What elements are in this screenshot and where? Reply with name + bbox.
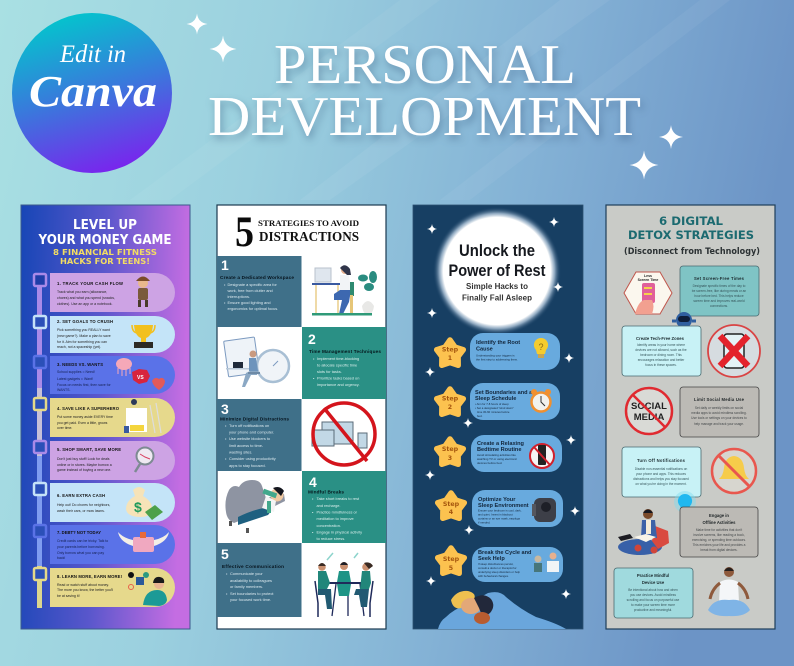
card 5: shop smart: Don't just buy stuff! Look for deals: [57, 457, 110, 461]
strategy 3: Minimize Digital Distractions: [220, 416, 289, 422]
heading: 5 strategies: [235, 209, 359, 256]
strategy 3: [217, 399, 302, 471]
card 5: shop smart: [50, 441, 175, 480]
heading: level up: YOUR MONEY GAME: [38, 233, 171, 248]
heading: 5 strategies: STRATEGIES TO AVOID: [258, 219, 359, 228]
icon: no social media: SOCIAL: [631, 401, 667, 412]
card: practice mindful device use: Practice Mindful: [637, 573, 669, 578]
card: turn off notifications: Disable non-essential notifications on: [635, 467, 688, 471]
card: set screen free times: screen time and improves real-world: [693, 299, 745, 303]
card 8: learn more: Read or watch stuff about money.: [57, 583, 109, 587]
strategy 2: [302, 327, 386, 399]
icon: detective: [136, 276, 150, 307]
icon: magnifier: [135, 448, 154, 472]
card 8: learn more: The more you know, the better you'll: [57, 588, 113, 592]
strategy 3: Consider using productivity: [229, 456, 276, 461]
card: engage in offline activities: break from digital devices.: [700, 548, 738, 552]
icon: bell crossed out: [712, 449, 756, 493]
card 6: earn extra cash: 6. EARN EXTRA CASH: [57, 493, 105, 498]
card 7: debt: Credit cards can be tricky. Talk to: [57, 539, 108, 543]
card: practice mindful device use: [614, 568, 693, 618]
badge: Edit in Canva: [12, 13, 172, 173]
card: turn off notifications: [622, 447, 701, 497]
card: turn off notifications: distractions and helps you stay focused: [633, 477, 689, 481]
card: practice mindful device use: you use devices. Avoid mindless: [630, 593, 676, 597]
card 8: learn more: [50, 568, 175, 607]
heading: 6 digital detox: [624, 214, 760, 257]
step 4: 4: [449, 509, 454, 516]
card: turn off notifications: Turn Off Notifications: [637, 458, 686, 463]
card: create tech free zones: focus in these spaces.: [645, 363, 677, 367]
card 7: debt: back!: [57, 556, 65, 560]
icon: sleep mask: [532, 498, 556, 522]
card 4: save like a superhero: [50, 398, 175, 437]
step 4: Sleep Environment: [478, 503, 529, 509]
icon: phone crossed out: [708, 325, 760, 377]
card 2: set goals: Pick something you REALLY want: [57, 328, 110, 332]
heading: 5 strategies: DISTRACTIONS: [259, 230, 359, 245]
step 2: Sleep Schedule: [475, 396, 516, 402]
illustration: sleeping person: [438, 591, 566, 629]
strategy 4: Mindful Breaks: [308, 490, 344, 494]
step 4: [438, 490, 563, 527]
card 6: earn extra cash: Help out! Do chores for neighbors,: [57, 503, 110, 507]
strategy 2: •: [313, 376, 315, 380]
step 2: time 30-60 minutes before: [477, 410, 510, 414]
card 4: save like a superhero: 4. SAVE LIKE A SUPERHERO: [57, 406, 120, 411]
card: set screen free times: Set Screen-Free Times: [694, 276, 745, 281]
card: create tech free zones: devices are not allowed, such as the: [635, 348, 687, 352]
step 3: Step: [442, 446, 459, 453]
step 3: devices before bed.: [477, 461, 502, 465]
icon: money bag: $: [134, 499, 142, 515]
strategy 2: slots for tasks.: [317, 369, 342, 374]
step 2: • Aim for 7-8 hours of sleep: [475, 402, 509, 406]
strategy 1: Designate a specific area for: [228, 282, 278, 287]
panel: distractions: [217, 205, 386, 629]
icon: trophy: [132, 325, 155, 348]
card 7: debt: [50, 525, 175, 564]
step 5: with behavioral changes.: [478, 574, 509, 578]
step 3: watching TV or using electronic: [477, 457, 518, 461]
strategy 3: •: [225, 456, 227, 461]
timeline connector: [34, 274, 46, 608]
card 1: track cash flow: [50, 273, 175, 312]
card: engage in offline activities: Offline Activities: [703, 520, 736, 525]
moon: [433, 207, 561, 335]
step 1: [437, 333, 560, 370]
strategy 4: •: [312, 530, 314, 534]
card: limit social media use: help manage and track your usage.: [694, 422, 744, 426]
icon: light bulb: ?: [538, 342, 544, 352]
card: turn off notifications: on what you're doing in the moment.: [635, 482, 687, 486]
card: engage in offline activities: involve screens, like reading a book,: [693, 533, 745, 537]
card: set screen free times: Designate specific times of the day to: [693, 284, 746, 288]
strategy 1: 1: [221, 257, 229, 273]
card: set screen free times: connections.: [710, 304, 728, 308]
icon: screen time hexagon: Less: [644, 274, 652, 278]
heading: level up: [38, 218, 171, 248]
strategy 5: 5: [221, 546, 229, 562]
card 3: needs vs wants: Focus on needs first, then save for: [57, 383, 112, 387]
strategy 1: ergonomics for optimal focus.: [228, 306, 278, 311]
icon: robot: [672, 312, 696, 334]
subheading: financial hacks: [53, 248, 157, 266]
strategy 4: Practice mindfulness or: [316, 510, 358, 514]
badge: Edit in Canva: Canva: [29, 67, 157, 116]
strategy 1: •: [224, 300, 226, 305]
icon: checklist and ladder: [124, 399, 161, 433]
card 1: track cash flow: clothes). Use an app or a notebook.: [57, 302, 112, 306]
card: create tech free zones: Identify areas in your home where: [637, 343, 685, 347]
strategy 4: Take short breaks to rest: [316, 496, 360, 501]
card: set screen free times: hour before bed. This helps reduce: [694, 294, 744, 298]
strategy 2: •: [313, 356, 315, 361]
subheading: financial hacks: HACKS FOR TEENS!: [60, 257, 150, 266]
step 3: Avoid stimulating activities like: [477, 453, 516, 457]
illustration: meditating person: [708, 567, 750, 616]
strategy 4: to reduce stress.: [316, 536, 345, 541]
card: practice mindful device use: scrolling and focus on purposeful use: [627, 598, 680, 602]
step 5: 5: [449, 565, 453, 572]
step 5: consult a doctor or therapist for: [478, 566, 517, 570]
card 5: shop smart: game instead of buying a new one.: [57, 468, 111, 472]
card: set screen free times: [680, 266, 759, 316]
step 5: [438, 547, 563, 582]
card 6: earn extra cash: [50, 483, 175, 522]
strategy 3: 3: [221, 401, 229, 417]
strategy 2: importance and urgency.: [317, 382, 360, 387]
strategy 3: your phone and computer.: [229, 430, 274, 434]
panel: power of rest: [413, 205, 583, 629]
strategy 1: •: [224, 282, 226, 287]
strategy 4: meditation to improve: [316, 516, 354, 521]
heading: unlock the power of rest: Power of Rest: [448, 262, 546, 280]
icon: person with shapes: [128, 572, 167, 606]
icon: sparkles top left: [186, 14, 236, 62]
strategy 2: to allocate specific time: [317, 362, 357, 368]
strategy 5: •: [226, 571, 228, 576]
step 5: Step: [443, 556, 460, 563]
strategy 4: and recharge.: [316, 503, 341, 508]
card 2: set goals: [50, 316, 175, 353]
card 3: needs vs wants: [50, 356, 175, 394]
strategy 5: Set boundaries to protect: [230, 591, 274, 596]
heading: 6 digital detox: (Disconnect from Technology): [624, 247, 760, 257]
step 1: 1: [448, 355, 452, 362]
step 1: Understanding your triggers is: [476, 354, 515, 358]
strategy 4: Engage in physical activity: [316, 530, 362, 534]
card 8: learn more: 8. LEARN MORE, EARN MORE!: [57, 574, 122, 579]
icon: no devices: [312, 403, 375, 465]
strategy 4: concentration.: [316, 523, 341, 528]
step 2: 2: [448, 404, 452, 411]
card: practice mindful device use: Device Use: [642, 580, 665, 585]
icon: screen time hexagon: Screen Time: [638, 278, 658, 282]
step 3: Create a Relaxing: [477, 441, 525, 447]
card: practice mindful device use: productive and meaningful.: [634, 608, 672, 612]
step 3: [437, 435, 562, 472]
strategy 1: work, free from clutter and: [228, 288, 273, 293]
card 3: needs vs wants: School supplies = Need!: [57, 370, 95, 374]
card: limit social media use: Use tools or settings on your devices to: [691, 416, 747, 420]
step 5: Break the Cycle and: [478, 550, 532, 556]
strategy 1: Create a Dedicated Workspace: [220, 275, 294, 280]
strategy 1: Ensure good lighting and: [228, 300, 271, 305]
heading: 5 strategies: 5: [235, 209, 254, 256]
strategy 4: [302, 471, 386, 543]
card 4: save like a superhero: over time.: [57, 426, 72, 430]
step 3: 3: [448, 455, 452, 462]
card: limit social media use: [680, 387, 759, 437]
step 4: Step: [443, 501, 460, 508]
icon: alarm clock: [531, 389, 551, 412]
card 2: set goals: for it. Aim for something you can: [57, 340, 107, 344]
card: limit social media use: Limit Social Media Use: [694, 397, 745, 402]
card: engage in offline activities: Engage in: [709, 513, 729, 518]
strategy 2: Implement time-blocking: [317, 356, 359, 361]
icon: doctor and patient: [534, 552, 559, 572]
card 2: set goals: reach, not a spaceship (yet).: [57, 345, 101, 349]
strategy 5: Communicate your: [230, 571, 263, 576]
card 1: track cash flow: 1. TRACK YOUR CASH FLOW: [57, 281, 123, 286]
step 1: Cause: [476, 346, 493, 352]
icon: winged wallet: [118, 532, 169, 552]
step 1: the first step to addressing them.: [476, 358, 518, 362]
step 5: underlying sleep disorders or help: [478, 570, 520, 574]
strategy 5: Effective Communication: [222, 564, 284, 569]
strategy 2: Time Management Techniques: [309, 349, 381, 354]
strategy 3: •: [225, 423, 227, 428]
strategy 3: Turn off notifications on: [229, 423, 269, 428]
card 7: debt: 7. DEBT? NOT TODAY: [57, 530, 101, 535]
card 1: track cash flow: chores) and what you spend (snacks,: [57, 296, 115, 300]
card 3: needs vs wants: WANTS.: [57, 388, 71, 392]
strategy 4: •: [312, 510, 314, 514]
card 5: shop smart: 5. SHOP SMART, SAVE MORE: [57, 447, 121, 452]
illustration: resting on sofa: [225, 480, 285, 533]
card: set screen free times: be screen-free, like during meals or an: [692, 289, 746, 293]
icon: sparkles bottom right: [630, 125, 683, 180]
strategy 3: •: [225, 436, 227, 441]
icon: no social media: MEDIA: [634, 412, 664, 423]
heading: unlock the power of rest: Simple Hacks to: [466, 282, 528, 291]
title: DEVELOPMENT: [208, 86, 641, 148]
subheading: financial hacks: 8 FINANCIAL FITNESS: [53, 248, 157, 257]
strategy 5: •: [226, 591, 228, 596]
strategy 3: apps to stay focused.: [229, 463, 266, 468]
heading: level up: LEVEL UP: [73, 218, 137, 233]
strategy 5: or family members.: [230, 584, 263, 589]
icon: screen time hexagon: [624, 272, 672, 314]
heading: unlock the power of rest: [448, 242, 546, 302]
step 4: if needed.: [478, 520, 491, 524]
card: create tech free zones: [622, 326, 701, 376]
card 1: track cash flow: Track what you earn (allowance,: [57, 290, 107, 294]
strategy 3: limit access to time-: [229, 443, 264, 448]
strategy 3: wasting sites.: [229, 450, 252, 454]
card 3: needs vs wants: 3. NEEDS VS. WANTS: [57, 362, 103, 367]
step 5: Seek Help: [478, 556, 505, 562]
card: turn off notifications: your phone and apps. This reduces: [636, 472, 686, 476]
illustration: time management: [224, 337, 289, 387]
card: engage in offline activities: [680, 507, 758, 557]
strategy 2: Prioritize tasks based on: [317, 376, 359, 380]
heading: unlock the power of rest: Finally Fall Asleep: [462, 294, 532, 302]
strategy 4: •: [312, 496, 314, 501]
step 2: bed.: [477, 414, 483, 418]
card 3: needs vs wants: Latest gadgets = Want!: [57, 377, 93, 381]
heading: 6 digital detox: 6 DIGITAL: [659, 214, 724, 228]
strategy 5: [217, 543, 302, 617]
strategy 1: [217, 256, 302, 327]
strategy 2: 2: [308, 331, 316, 347]
card 6: earn extra cash: wash their cars, or mow lawns.: [57, 509, 105, 513]
heading: unlock the power of rest: Unlock the: [459, 242, 535, 260]
step 4: Ensure your bedroom is cool, dark,: [478, 508, 522, 512]
panel: money game: [21, 205, 190, 629]
step 2: Set Boundaries and a: [475, 390, 533, 396]
title: PERSONAL: [274, 34, 576, 96]
step 1: Step: [442, 346, 459, 354]
step 4: curtains or an eye mask, earplugs: [478, 516, 521, 520]
card 7: debt: Only borrow what you can pay: [57, 551, 104, 555]
card: create tech free zones: Create Tech-Free Zones: [636, 336, 685, 341]
icon: no phone: [530, 444, 554, 468]
badge: Edit in Canva: Edit in: [59, 41, 126, 68]
panel: digital detox: [606, 205, 775, 629]
card 7: debt: your parents before borrowing.: [57, 545, 105, 549]
card 2: set goals: 2. SET GOALS TO CRUSH: [57, 319, 113, 324]
card 4: save like a superhero: Put some money aside EVERY time: [57, 415, 113, 419]
strategy 1: interruptions.: [228, 294, 250, 299]
title: [208, 34, 641, 148]
card 8: learn more: be at saving it!: [57, 594, 80, 598]
heading: 6 digital detox: DETOX STRATEGIES: [628, 228, 754, 242]
step 2: Step: [442, 396, 459, 402]
strategy 3: Use website blockers to: [229, 436, 270, 441]
step 2: [437, 383, 560, 420]
card: limit social media use: media apps to avoid mindless scrolling.: [691, 411, 747, 415]
step 5: If sleep disturbances persist,: [478, 562, 514, 566]
card: create tech free zones: encourages relaxation and better: [638, 358, 685, 362]
card: engage in offline activities: exercising, or spending time outdoors.: [692, 538, 746, 542]
card 5: shop smart: online or in stores. Maybe borrow a: [57, 463, 112, 467]
illustration: people at table: [315, 553, 373, 617]
icon: no social media: [626, 388, 672, 434]
card: practice mindful device use: to make your screen time more: [631, 603, 675, 607]
icon: brain and heart: VS: [137, 375, 144, 381]
step 2: • Set a designated "wind down": [475, 406, 514, 410]
card 2: set goals: (new game?). Make a plan to save: [57, 334, 111, 338]
card: engage in offline activities: This enriches your life and provides a: [693, 543, 746, 547]
step 1: Identify the Root: [476, 340, 520, 346]
illustration: reading person: [618, 509, 669, 555]
strategy 4: 4: [309, 474, 317, 490]
card: engage in offline activities: Make time for activities that don't: [696, 528, 742, 532]
illustration: person at desk: [312, 265, 377, 316]
card: practice mindful device use: Be intentional about how and when: [628, 588, 678, 592]
card 4: save like a superhero: you get paid. Even a little, grows: [57, 421, 108, 425]
step 3: Bedtime Routine: [477, 447, 521, 453]
card: create tech free zones: bedroom or dining room. This: [640, 353, 682, 357]
strategy 5: your focused work time.: [230, 597, 271, 602]
decorative stars: [425, 217, 580, 599]
step 4: Optimize Your: [478, 497, 516, 503]
icon: glowing bulb: [674, 491, 696, 514]
card: limit social media use: Set daily or weekly limits on social: [695, 406, 743, 410]
step 4: and quiet. Invest in blackout: [478, 512, 513, 516]
strategy 5: availability to colleagues: [230, 578, 272, 583]
